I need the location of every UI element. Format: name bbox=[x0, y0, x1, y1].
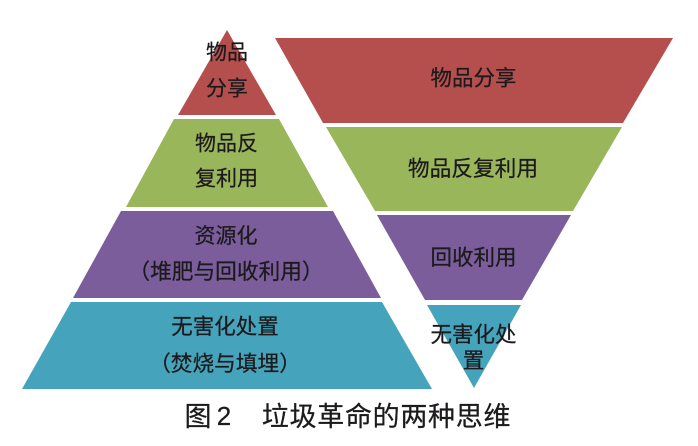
tier: sharing (red triangle) bbox=[178, 30, 276, 115]
tier: safe disposal (teal): 无害化处置 bbox=[171, 315, 279, 339]
caption: 垃圾革命的两种思维 bbox=[262, 402, 511, 432]
tier: reuse (green) bbox=[126, 119, 328, 207]
tier: sharing (red triangle): 物品 bbox=[206, 42, 248, 64]
tier: safe disposal (teal) bbox=[22, 302, 432, 389]
tier: sharing (red): 物品分享 bbox=[430, 66, 517, 90]
tier: resource recovery (purple): （堆肥与回收利用） bbox=[128, 259, 324, 284]
tier: recycling (purple): 回收利用 bbox=[430, 246, 517, 270]
tier: reuse (green): 物品反 bbox=[195, 132, 258, 156]
tier: safe disposal (teal triangle) bbox=[427, 305, 521, 388]
tier: resource recovery (purple) bbox=[73, 211, 381, 298]
panel: inverted pyramid bbox=[275, 38, 673, 388]
tier: safe disposal (teal triangle): 无害化处 bbox=[430, 323, 517, 347]
tier: reuse (green): 物品反复利用 bbox=[408, 156, 538, 181]
tier: safe disposal (teal triangle): 置 bbox=[463, 349, 484, 373]
tier: safe disposal (teal): （焚烧与填埋） bbox=[149, 351, 301, 376]
tier: recycling (purple) bbox=[377, 215, 571, 300]
panel: upright pyramid bbox=[22, 30, 432, 389]
tier: sharing (red triangle): 分享 bbox=[206, 78, 248, 100]
tier: reuse (green) bbox=[326, 127, 622, 211]
tier: reuse (green): 复利用 bbox=[195, 168, 258, 190]
caption: 2 bbox=[217, 401, 231, 431]
tier: resource recovery (purple): 资源化 bbox=[194, 225, 258, 248]
tier: sharing (red) bbox=[275, 38, 673, 123]
caption: 图 bbox=[184, 402, 212, 432]
